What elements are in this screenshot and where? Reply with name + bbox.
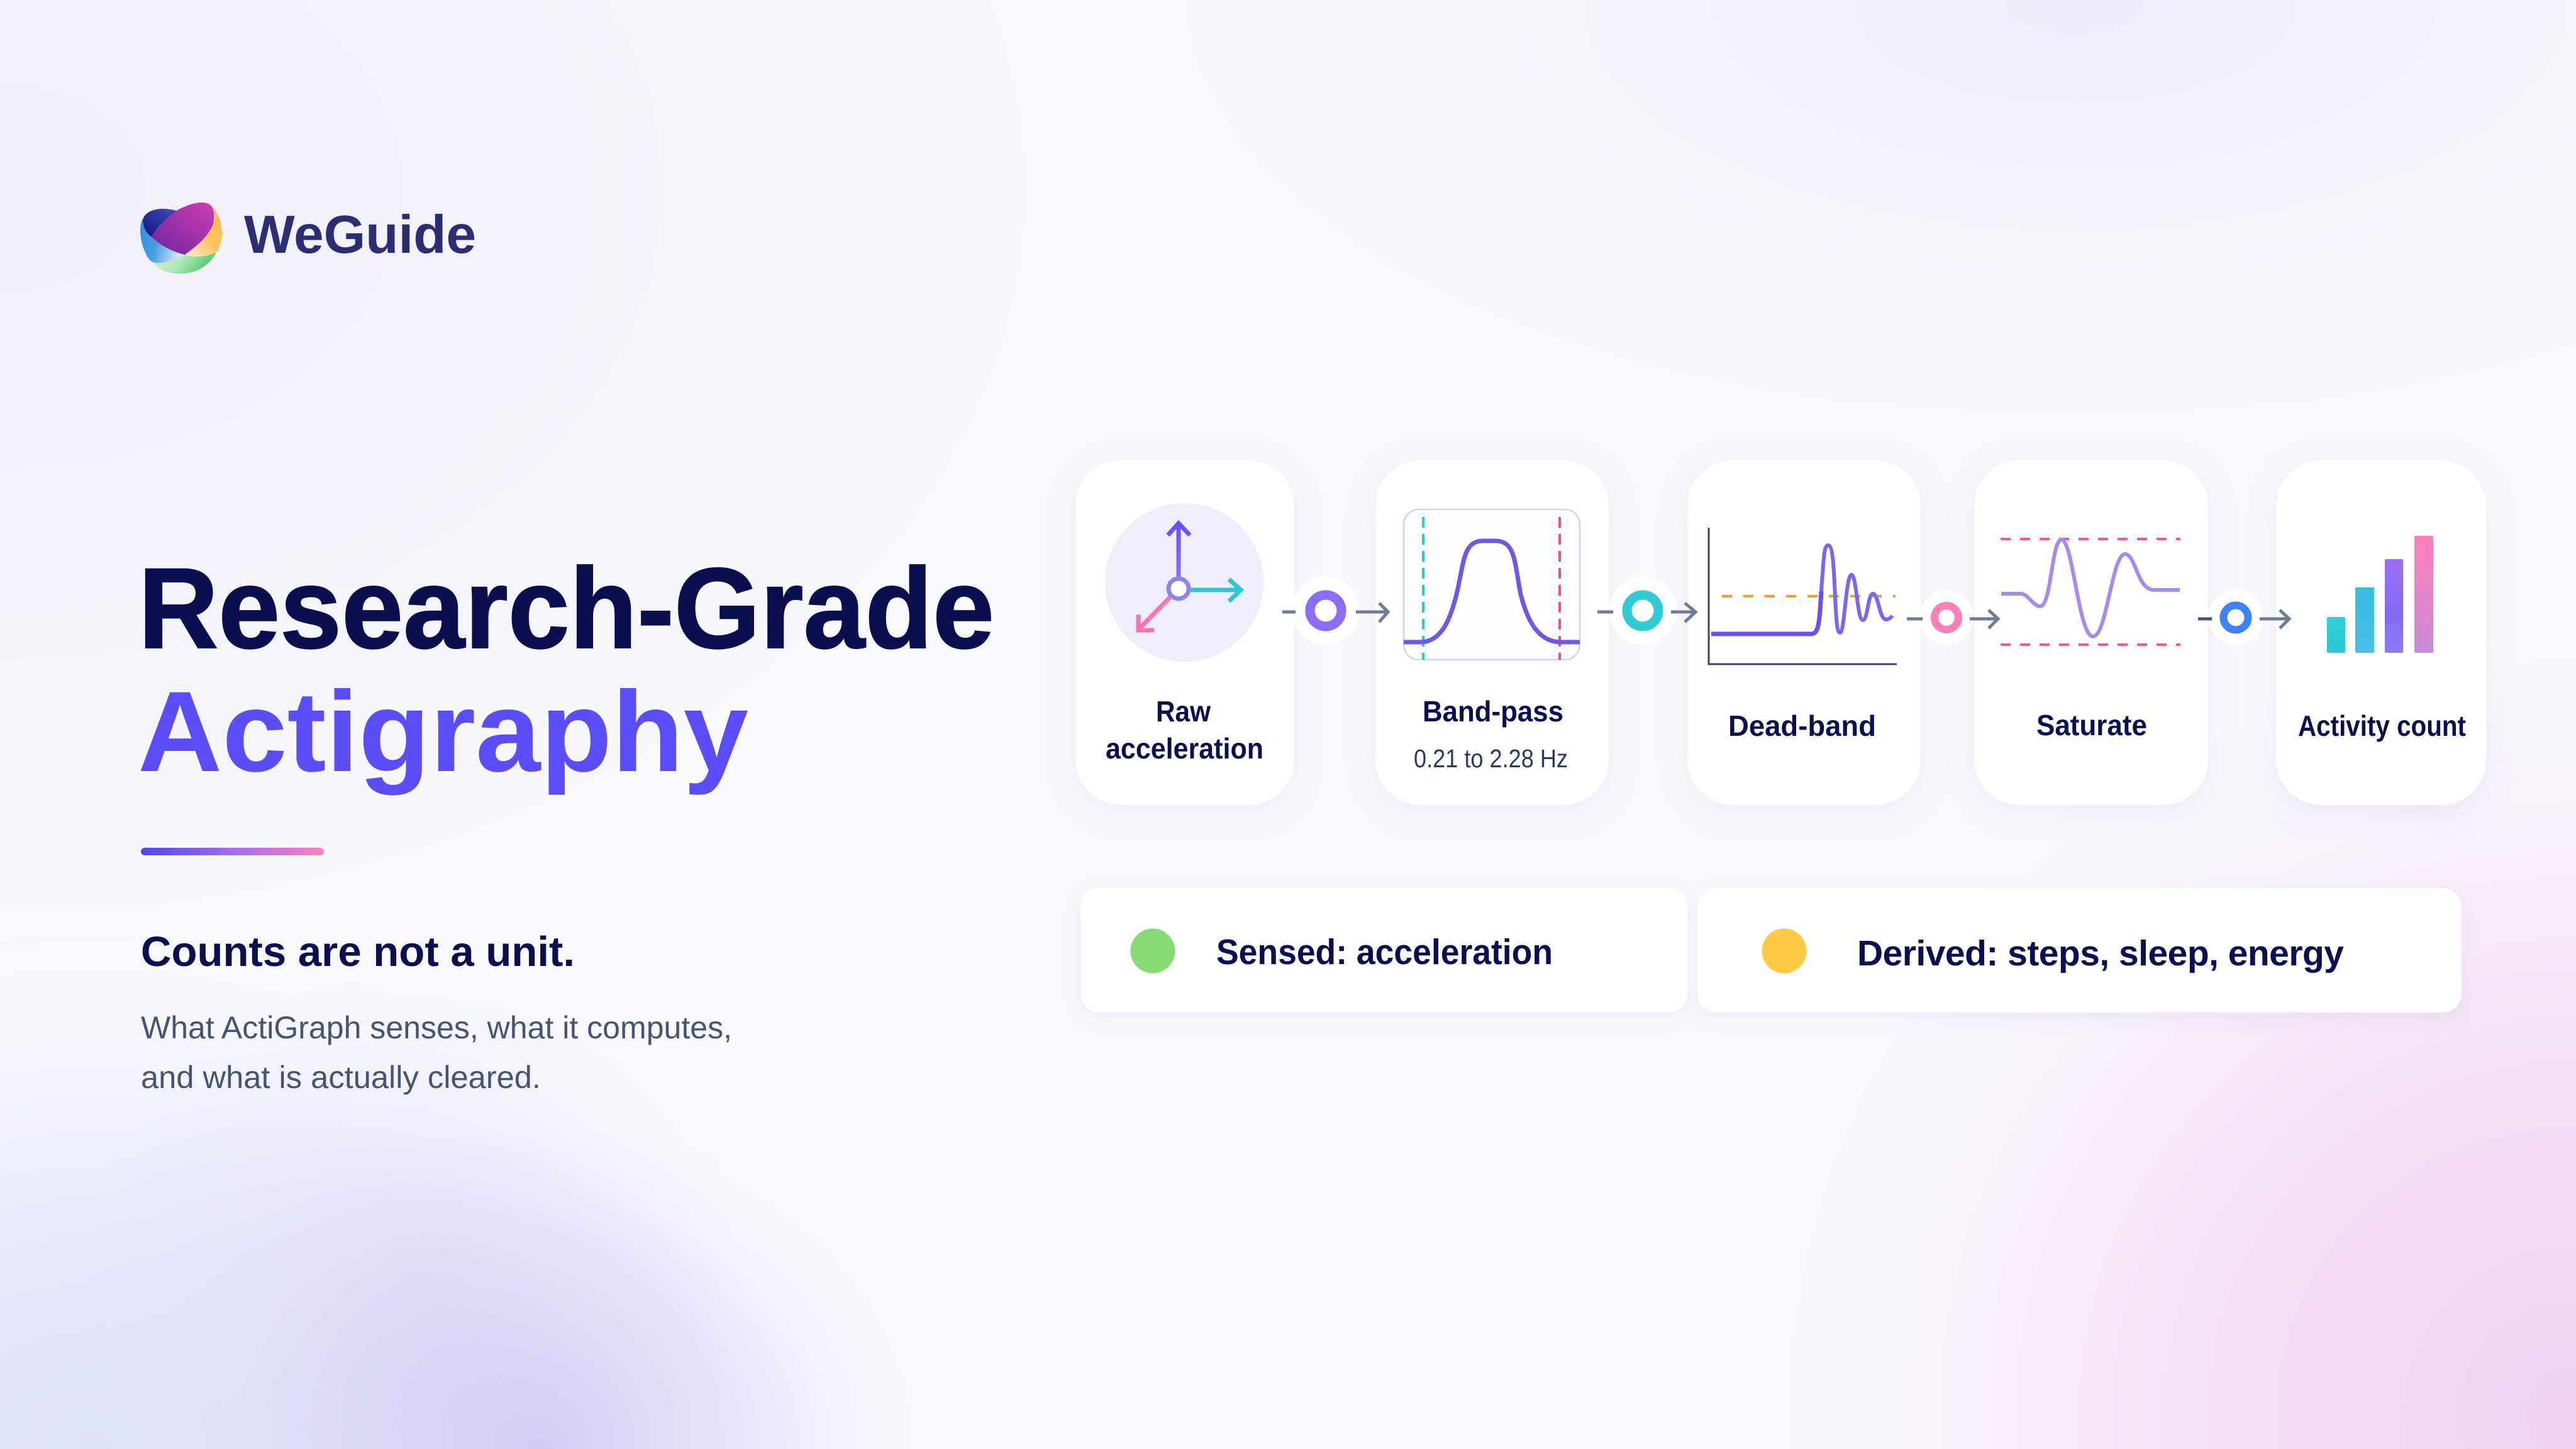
wordmark: WeGuide [244, 205, 476, 265]
connector: dead-band to saturate [1907, 591, 1998, 645]
connector: saturate to activity count [2198, 590, 2289, 645]
title line 1: Research-Grade [138, 544, 994, 672]
title [138, 544, 994, 796]
chart: dead-band signal [1709, 528, 1897, 664]
accent rule [141, 848, 324, 855]
chart: rising bars [2327, 536, 2433, 653]
panel: dead-band [1687, 460, 1921, 805]
body text: What ActiGraph senses, what it computes, [141, 1010, 732, 1045]
body text: and what is actually cleared. [141, 1060, 541, 1095]
icon: three axis acceleration [1105, 503, 1263, 662]
label: acceleration [1106, 732, 1263, 765]
panel: derived legend [1697, 888, 2462, 1013]
legend text: Sensed: acceleration [1216, 932, 1553, 972]
panel: sensed legend [1080, 888, 1687, 1013]
label: Saturate [2036, 709, 2147, 741]
title line 2: Actigraphy [138, 667, 748, 796]
panel: band-pass [1375, 460, 1609, 805]
icon: yellow dot [1762, 928, 1806, 974]
logo: WeGuide [140, 203, 476, 274]
connector: band-pass to dead-band [1597, 577, 1696, 645]
chart: saturated wave [2001, 539, 2180, 645]
icon: WeGuide heart mark [140, 203, 222, 274]
chart: band-pass filter curve [1404, 509, 1580, 660]
subtitle: Counts are not a unit. [141, 928, 575, 975]
label: Dead-band [1728, 709, 1876, 742]
label: Band-pass [1423, 695, 1563, 728]
icon: green dot [1131, 928, 1175, 974]
panel: raw acceleration [1075, 460, 1294, 805]
sublabel: 0.21 to 2.28 Hz [1414, 744, 1568, 773]
panel: activity count [2276, 460, 2486, 805]
label: Raw [1156, 695, 1211, 728]
body text [141, 1010, 732, 1095]
label [1106, 695, 1263, 765]
panel: saturate [1974, 460, 2208, 805]
label: Activity count [2298, 709, 2466, 742]
connector: raw to band-pass [1282, 577, 1388, 645]
legend text: Derived: steps, sleep, energy [1857, 933, 2344, 974]
